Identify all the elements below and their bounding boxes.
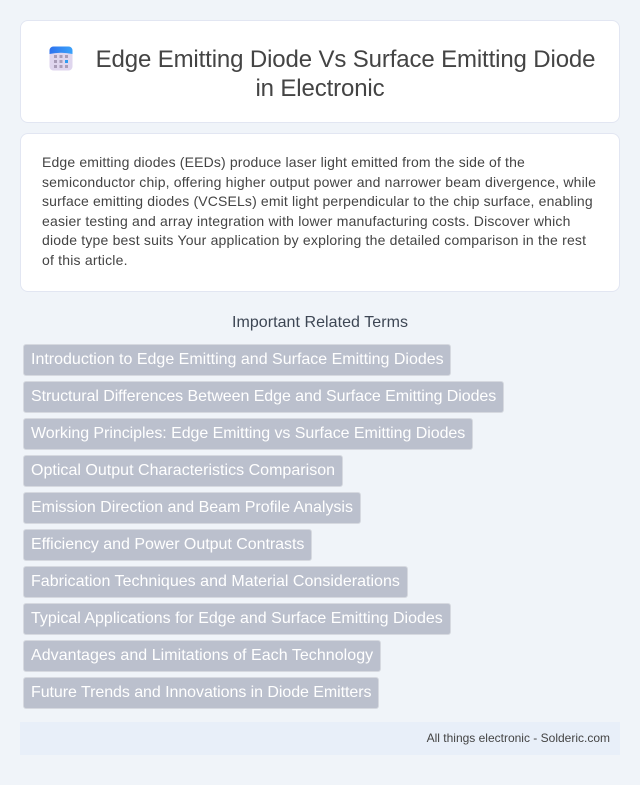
tag: advantages: Advantages and Limitations of Each Technology: [31, 647, 373, 664]
tag: typical applications: [23, 603, 451, 635]
intro paragraph: diode type best suits Your application by exploring the detailed comparison in the rest: [42, 232, 586, 248]
tag: fabrication: Fabrication Techniques and Material Considerations: [31, 573, 400, 590]
tag: efficiency: [23, 529, 312, 561]
related terms list: [23, 344, 504, 709]
title: in Electronic: [255, 75, 385, 102]
tag: fabrication: [23, 566, 408, 598]
intro text panel: [20, 133, 620, 292]
intro paragraph: of this article.: [42, 252, 128, 268]
tag: structural differences: Structural Differences Between Edge and Surface Emitting Diodes: [31, 388, 496, 405]
intro paragraph: [42, 154, 596, 268]
title: [96, 46, 595, 102]
footer text: All things electronic - Solderic.com: [427, 731, 610, 745]
tag: future trends: Future Trends and Innovations in Diode Emitters: [31, 684, 371, 701]
tag: working principles: Working Principles: Edge Emitting vs Surface Emitting Diodes: [31, 425, 465, 442]
header panel: [20, 20, 620, 123]
tag: introduction: Introduction to Edge Emitting and Surface Emitting Diodes: [31, 351, 444, 368]
tag: emission direction: [23, 492, 361, 524]
intro paragraph: Edge emitting diodes (EEDs) produce laser light emitted from the side of the: [42, 154, 525, 170]
tag: typical applications: Typical Applications for Edge and Surface Emitting Diodes: [31, 610, 443, 627]
tag: working principles: [23, 418, 473, 450]
tag: advantages: [23, 640, 381, 672]
tag: optical output: [23, 455, 343, 487]
tag: efficiency: Efficiency and Power Output Contrasts: [31, 536, 304, 553]
intro paragraph: easier testing and array integration with lower manufacturing costs. Discover which: [42, 213, 571, 229]
tag: introduction: [23, 344, 451, 376]
tag: optical output: Optical Output Characteristics Comparison: [31, 462, 335, 479]
tag: emission direction: Emission Direction and Beam Profile Analysis: [31, 499, 353, 516]
title: Edge Emitting Diode Vs Surface Emitting Diode: [96, 46, 595, 73]
icon: calendar: [50, 46, 72, 70]
related terms heading: Important Related Terms: [232, 314, 408, 331]
footer bar: [20, 722, 620, 755]
tag: structural differences: [23, 381, 504, 413]
tag: future trends: [23, 677, 379, 709]
intro paragraph: semiconductor chip, offering higher output power and narrower beam divergence, while: [42, 174, 596, 190]
intro paragraph: surface emitting diodes (VCSELs) emit light perpendicular to the chip surface, enabling: [42, 193, 593, 209]
